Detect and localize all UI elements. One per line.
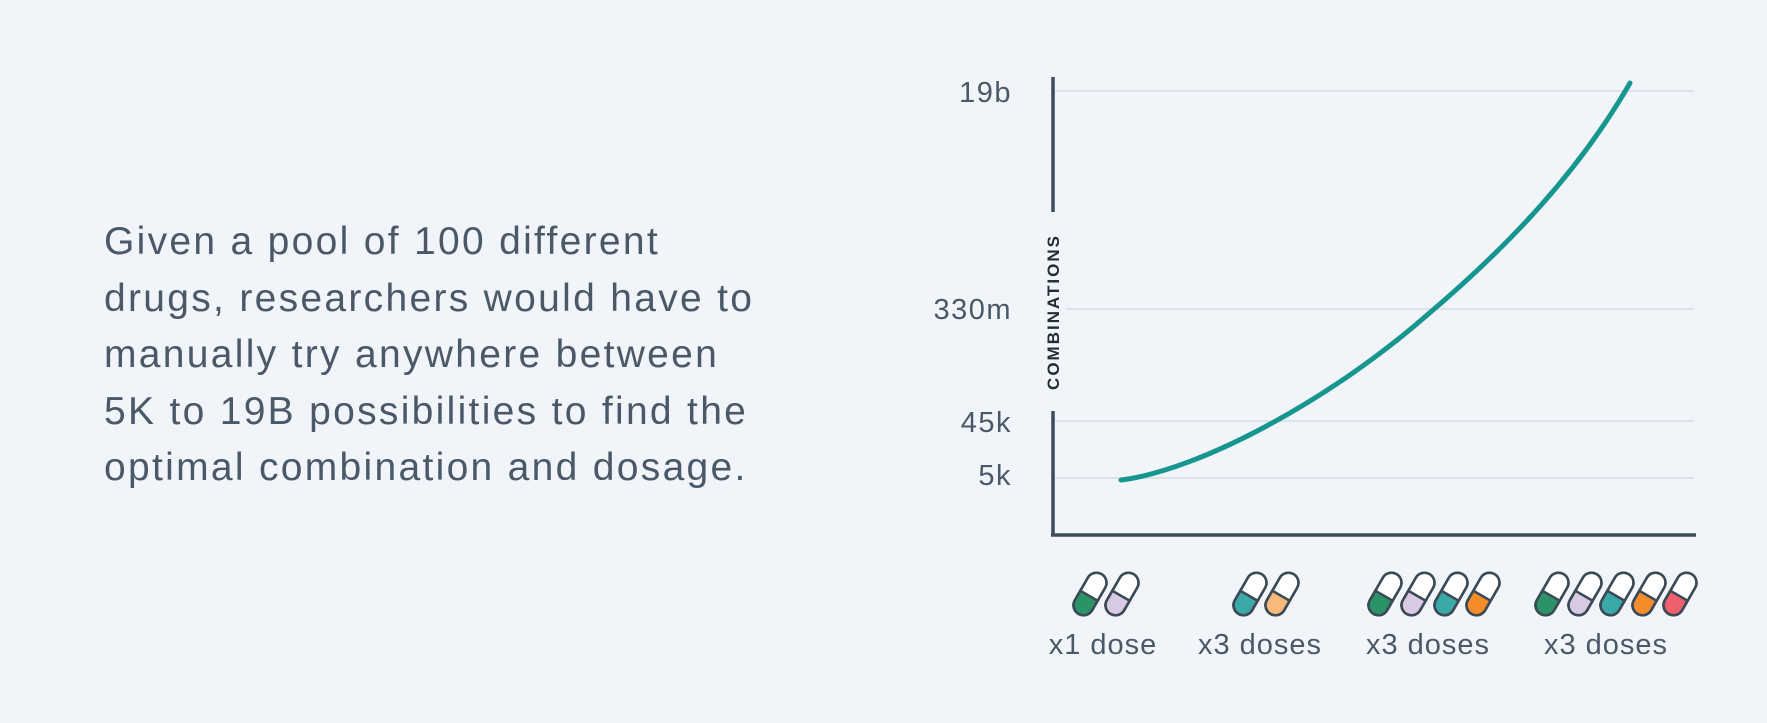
y axis title: COMBINATIONS: [1044, 234, 1063, 390]
pills: [1070, 569, 1700, 619]
x axis labels: [1049, 629, 1668, 661]
intro text: optimal combination and dosage.: [104, 446, 748, 489]
y axis labels: 19b: [959, 77, 1012, 109]
y axis labels: 5k: [978, 460, 1012, 492]
curve: [1121, 83, 1630, 480]
intro text: Given a pool of 100 different: [104, 220, 660, 263]
y axis labels: 45k: [961, 407, 1012, 439]
intro text: drugs, researchers would have to: [104, 276, 754, 320]
y axis labels: 330m: [933, 294, 1012, 326]
x axis labels: x3 doses: [1366, 629, 1490, 661]
intro text: manually try anywhere between: [104, 333, 719, 376]
intro text: 5K to 19B possibilities to find the: [104, 390, 748, 432]
x axis labels: x3 doses: [1198, 629, 1322, 661]
axes: [1051, 77, 1696, 536]
intro text: [104, 220, 754, 489]
y axis labels: [933, 77, 1012, 492]
x axis labels: x3 doses: [1544, 629, 1668, 661]
x axis labels: x1 dose: [1049, 629, 1157, 661]
